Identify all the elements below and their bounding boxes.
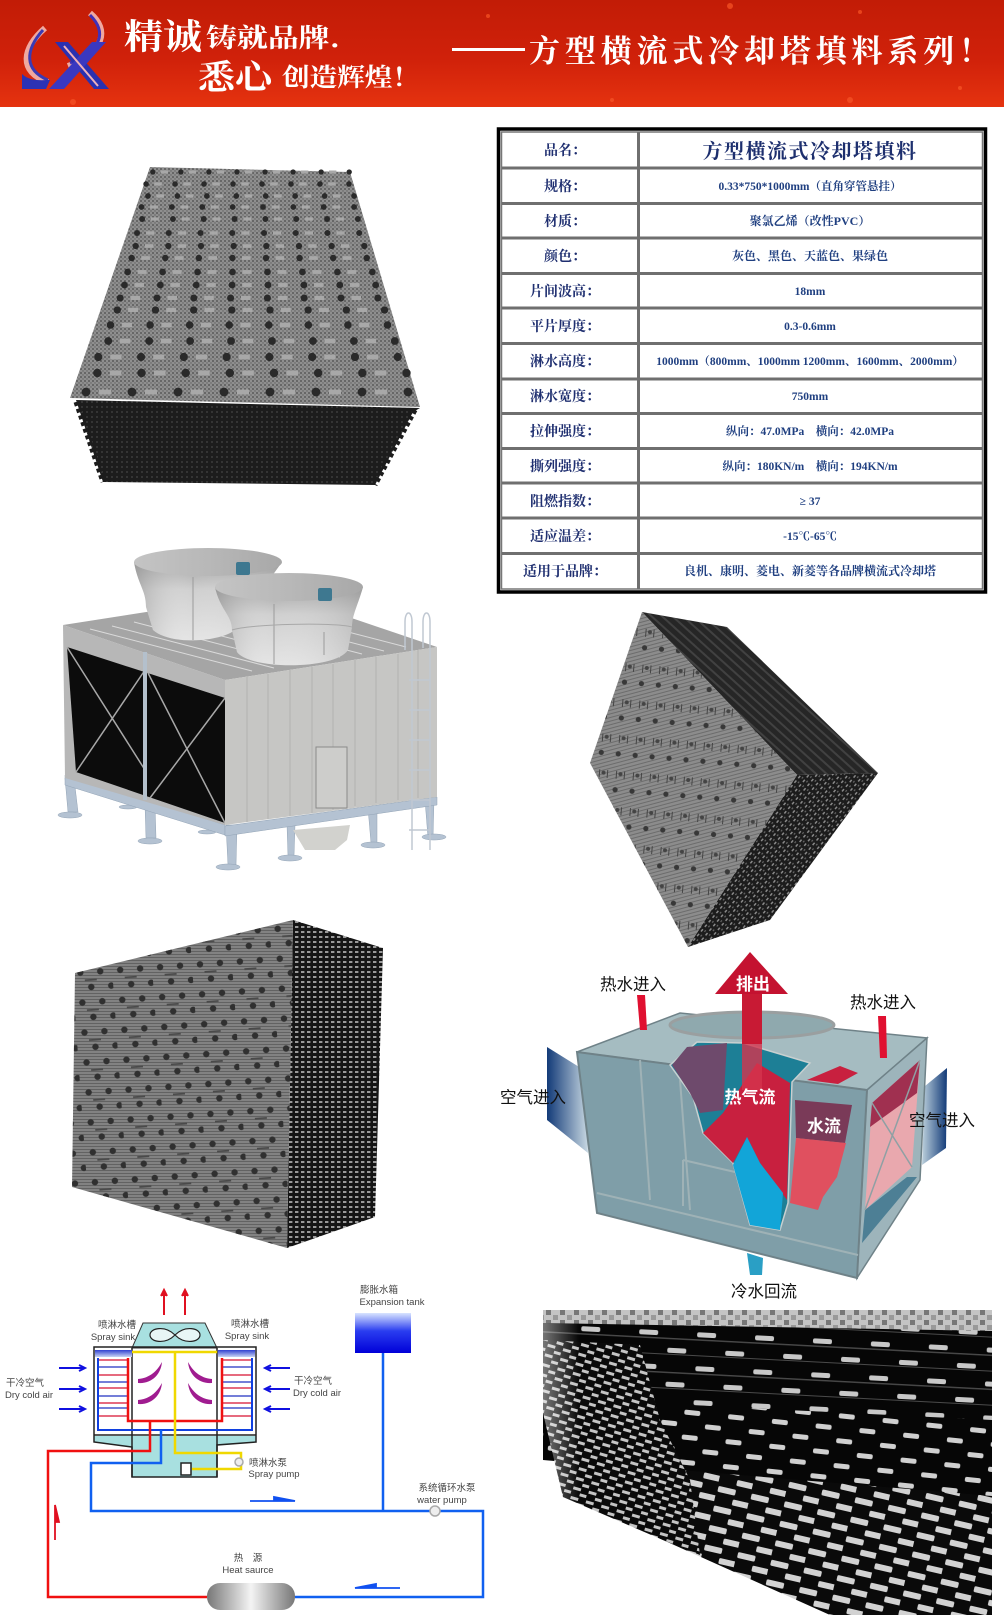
row: spray width: 淋水宽度： (530, 388, 600, 405)
series title: 方型横流式冷却塔填料系列！ (529, 26, 990, 71)
row: flame index: ≥ 37 (800, 496, 821, 508)
spray pump symbol (235, 1458, 243, 1466)
labels: water pump (416, 1495, 467, 1506)
row: sheet thickness: 0.3-0.6mm (784, 321, 836, 333)
fan ring (670, 1012, 834, 1038)
water pump symbol (430, 1506, 440, 1516)
row: temperature range: 适应温差： (530, 528, 600, 545)
right window (865, 1060, 920, 1210)
cold water line (91, 1353, 483, 1597)
row: specification (544, 178, 902, 195)
deck (63, 592, 437, 680)
airflow cutaway diagram (500, 952, 975, 1301)
label: hot water in left: 热水进入 (600, 975, 666, 994)
slogan line 1 (124, 10, 340, 60)
row: tear strength: 撕列强度： (530, 458, 600, 475)
fill coils (98, 1358, 252, 1430)
row: tear strength (530, 458, 898, 475)
labels: 干冷空气 (6, 1377, 44, 1389)
labels: 喷淋水槽 (98, 1319, 136, 1331)
labels: 喷淋水泵 (249, 1457, 287, 1469)
air arrows (59, 1365, 290, 1412)
row: product name: 品名： (544, 142, 586, 159)
labels: 干冷空气 (294, 1375, 332, 1387)
row: tensile strength (530, 423, 894, 440)
flow direction arrows (250, 1497, 400, 1588)
fan stack rear (134, 548, 282, 640)
water circuit schematic (5, 1284, 483, 1610)
row: temperature range: -15℃-65℃ (783, 531, 837, 543)
tower casing (577, 1013, 927, 1090)
row: flame index: 阻燃指数： (530, 493, 600, 510)
row: sheet thickness: 平片厚度： (530, 318, 600, 335)
exhaust arrow (715, 952, 788, 1090)
row: spray width: 750mm (792, 391, 829, 403)
labels (5, 1284, 476, 1576)
cutaway interior (670, 1042, 810, 1230)
air inlet wings (547, 1047, 588, 1153)
slogan line 2: 悉心 (198, 50, 276, 99)
row: brands: 适用于品牌： (523, 563, 607, 580)
exhaust arrow: 排出 (736, 975, 770, 994)
row: tear strength: 纵向：180KN/m 横向：194KN/m (722, 459, 898, 473)
row: sheet thickness (530, 318, 836, 335)
row: temperature range (530, 528, 837, 545)
row: spray height: 淋水高度： (530, 353, 600, 370)
product photo: fill block top view (70, 167, 420, 485)
labels: Spray sink (91, 1332, 135, 1343)
row: wave height: 片间波高： (530, 283, 600, 300)
side casing (225, 647, 437, 825)
labels: 热 源 (234, 1552, 263, 1564)
labels: Dry cold air (5, 1390, 53, 1401)
fill block side view (72, 920, 383, 1248)
hot water line (48, 1358, 222, 1597)
ladder (405, 613, 430, 850)
row: brands: 良机、康明、菱电、新菱等各品牌横流式冷却塔 (684, 563, 936, 578)
logo (22, 13, 109, 89)
row: colour (544, 248, 888, 265)
row: specification: 规格： (544, 178, 586, 195)
fill panels (63, 625, 225, 825)
labels: Spray pump (248, 1469, 300, 1480)
hot water pipes (637, 995, 647, 1030)
fill block diamond view (590, 612, 878, 947)
row: wave height (530, 283, 826, 300)
fill close-up photo (543, 1310, 992, 1615)
row: spray height: 1000mm（800mm、1000mm 1200mm、1600mm、2000mm） (656, 355, 964, 368)
labels: 喷淋水槽 (231, 1318, 269, 1330)
row: product name (544, 139, 918, 163)
heat source (207, 1583, 295, 1610)
labels: Spray sink (225, 1331, 269, 1342)
access door (316, 747, 347, 808)
slogan line 2: 创造辉煌！ (282, 58, 420, 94)
row: tensile strength: 纵向：47.0MPa 横向：42.0MPa (726, 424, 894, 438)
tower body (94, 1323, 256, 1477)
slogan line 2 (198, 50, 420, 99)
label: cold water return: 冷水回流 (731, 1282, 797, 1301)
label: air in right: 空气进入 (909, 1111, 975, 1130)
row: spray width (530, 388, 829, 405)
airflow curved arrows (138, 1362, 212, 1404)
spray line (132, 1352, 241, 1469)
spray pump box (181, 1463, 191, 1475)
label: hot water in right: 热水进入 (850, 993, 916, 1012)
cold return pipe (747, 1253, 763, 1275)
water panel (795, 1100, 852, 1143)
labels: Dry cold air (293, 1388, 341, 1399)
row: spray height (530, 353, 964, 370)
row: brands (523, 563, 936, 580)
slogan line 1: 精诚 (124, 10, 202, 60)
labels: 膨胀水箱 (360, 1284, 398, 1296)
row: material (544, 213, 870, 230)
label: water flow: 水流 (807, 1117, 841, 1136)
exhaust arrows (161, 1290, 188, 1315)
spec table (498, 129, 986, 592)
legs and base (58, 775, 446, 870)
label: air in left: 空气进入 (500, 1088, 566, 1107)
slogan line 1: 铸就品牌. (206, 18, 340, 55)
row: colour: 灰色、黑色、天蓝色、果绿色 (732, 248, 888, 263)
roof coil (807, 1066, 858, 1084)
row: colour: 颜色： (544, 248, 586, 265)
labels: Expansion tank (360, 1297, 425, 1308)
row: product name: 方型横流式冷却塔填料 (702, 139, 918, 163)
expansion tank (355, 1313, 411, 1353)
fan stack front (215, 573, 363, 665)
row: specification: 0.33*750*1000mm（直角穿管悬挂） (718, 179, 902, 193)
cooling tower illustration (58, 548, 446, 870)
row: material: 材质： (544, 213, 586, 230)
row: material: 聚氯乙烯（改性PVC） (750, 213, 870, 228)
row: wave height: 18mm (795, 286, 826, 298)
row: tensile strength: 拉伸强度： (530, 423, 600, 440)
labels: 系统循环水泵 (418, 1482, 476, 1494)
labels: Heat saurce (222, 1565, 274, 1576)
banner (0, 0, 1004, 107)
row: flame index (530, 493, 821, 510)
label: hot air flow: 热气流 (724, 1087, 776, 1107)
